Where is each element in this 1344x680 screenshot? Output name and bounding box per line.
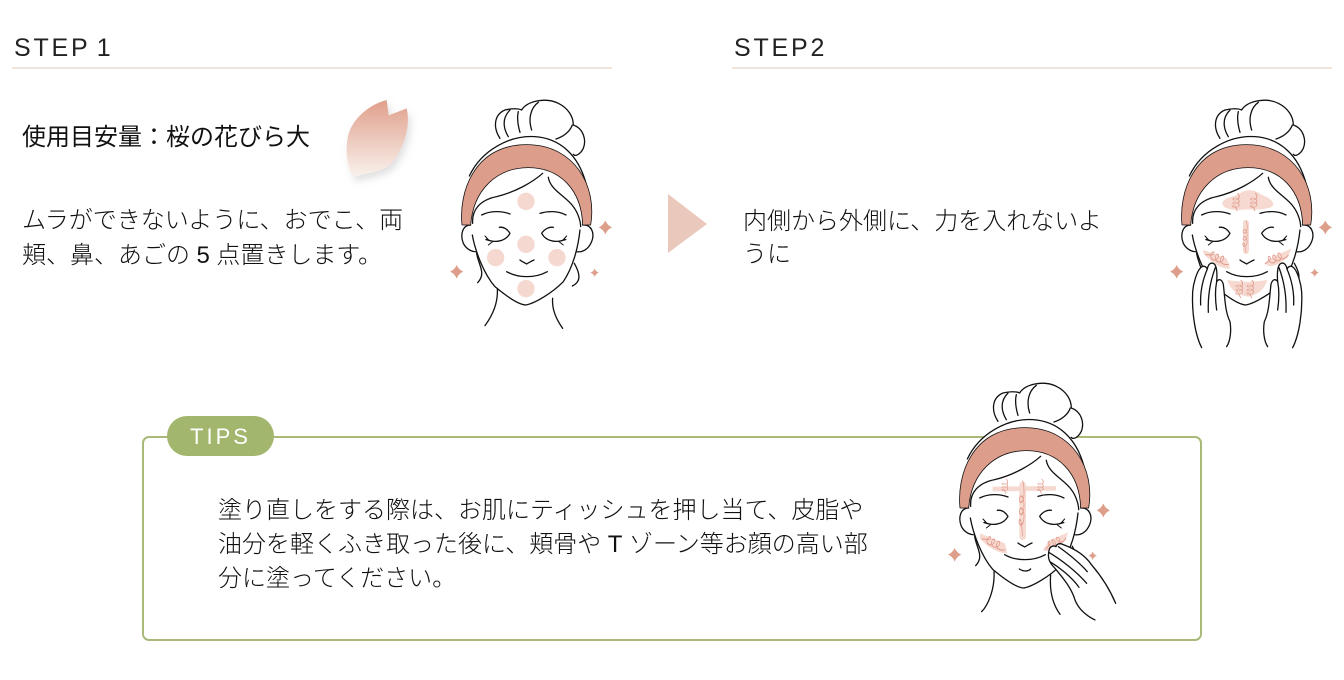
tips panel border: [142, 436, 1202, 641]
step 1 instructions: ムラができないように、おでこ、両: [22, 207, 403, 234]
arrow between steps: [668, 194, 707, 253]
tips text: 塗り直しをする際は、お肌にティッシュを押し当て、皮脂や: [218, 497, 863, 524]
tips text: 分に塗ってください。: [218, 565, 456, 592]
step 2 heading: STEP2: [734, 34, 827, 62]
step 1 heading: STEP 1: [14, 34, 114, 62]
step 2 instructions: [743, 208, 1102, 268]
tips face illustration with hand: [948, 383, 1116, 620]
tips text: 油分を軽くふき取った後に、頬骨や T ゾーン等お顔の高い部: [218, 531, 868, 558]
petal icon: [347, 100, 408, 177]
step 2 face illustration with hands: [1170, 100, 1332, 348]
step 2 instructions: 内側から外側に、力を入れないよ: [743, 208, 1102, 235]
usage amount text: 使用目安量：桜の花びら大: [22, 117, 310, 152]
tips badge: [167, 416, 274, 456]
step 1 instructions: [22, 207, 403, 269]
step 1 instructions: 頬、鼻、あごの 5 点置きします。: [22, 242, 382, 269]
step 2 instructions: うに: [743, 241, 791, 268]
step 1 face illustration: [450, 100, 612, 328]
tips text: [218, 497, 868, 592]
tips badge: TIPS: [190, 424, 251, 449]
